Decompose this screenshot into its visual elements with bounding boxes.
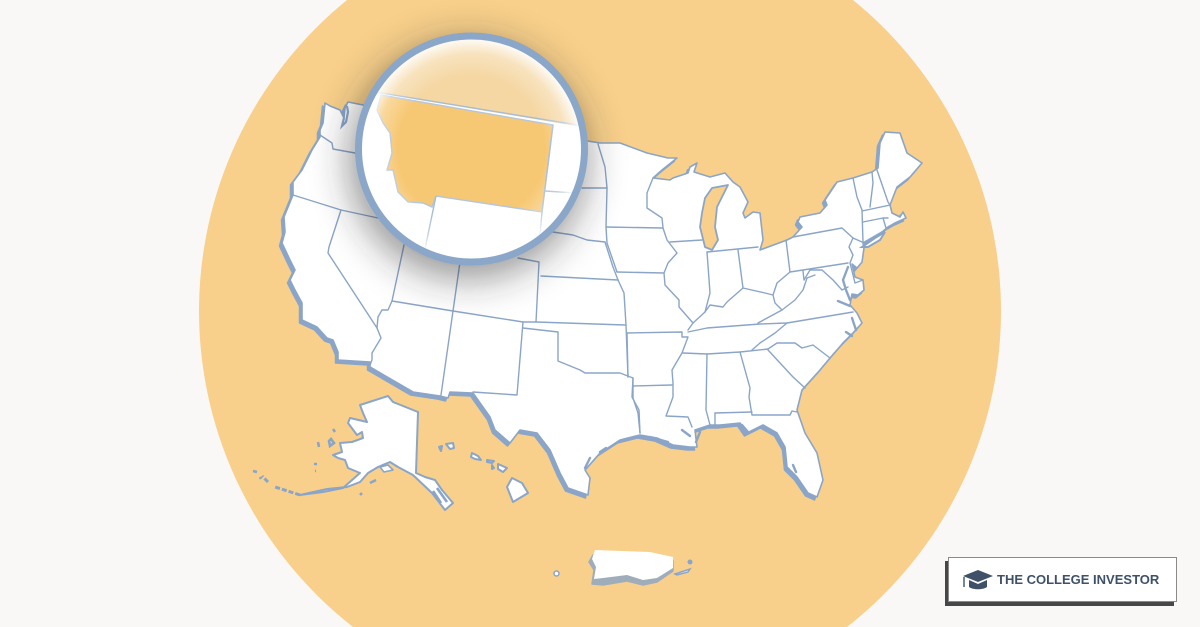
state borders: [293, 135, 890, 433]
puget sound: [342, 106, 348, 126]
coastal detail: [585, 267, 856, 472]
map: contiguous United States: [280, 102, 922, 500]
lens: montana: [377, 95, 553, 212]
icon: graduation cap: [963, 570, 993, 590]
magnifier lens: [350, 30, 600, 262]
map: hawaii: [439, 443, 528, 502]
magnifier lens shadow: [350, 42, 586, 278]
map: alaska: [253, 396, 453, 510]
long island: [862, 232, 885, 247]
lens: edge fade: [376, 40, 579, 248]
lens: state lines: [375, 92, 590, 249]
lens ring: [358, 36, 584, 262]
logo text: THE COLLEGE INVESTOR: [997, 572, 1159, 587]
map: puerto rico: [554, 550, 692, 585]
lens: canada area: [378, 40, 578, 126]
lake michigan: [700, 185, 728, 250]
logo: the college investor: [948, 557, 1177, 602]
background circle: [199, 0, 1001, 627]
